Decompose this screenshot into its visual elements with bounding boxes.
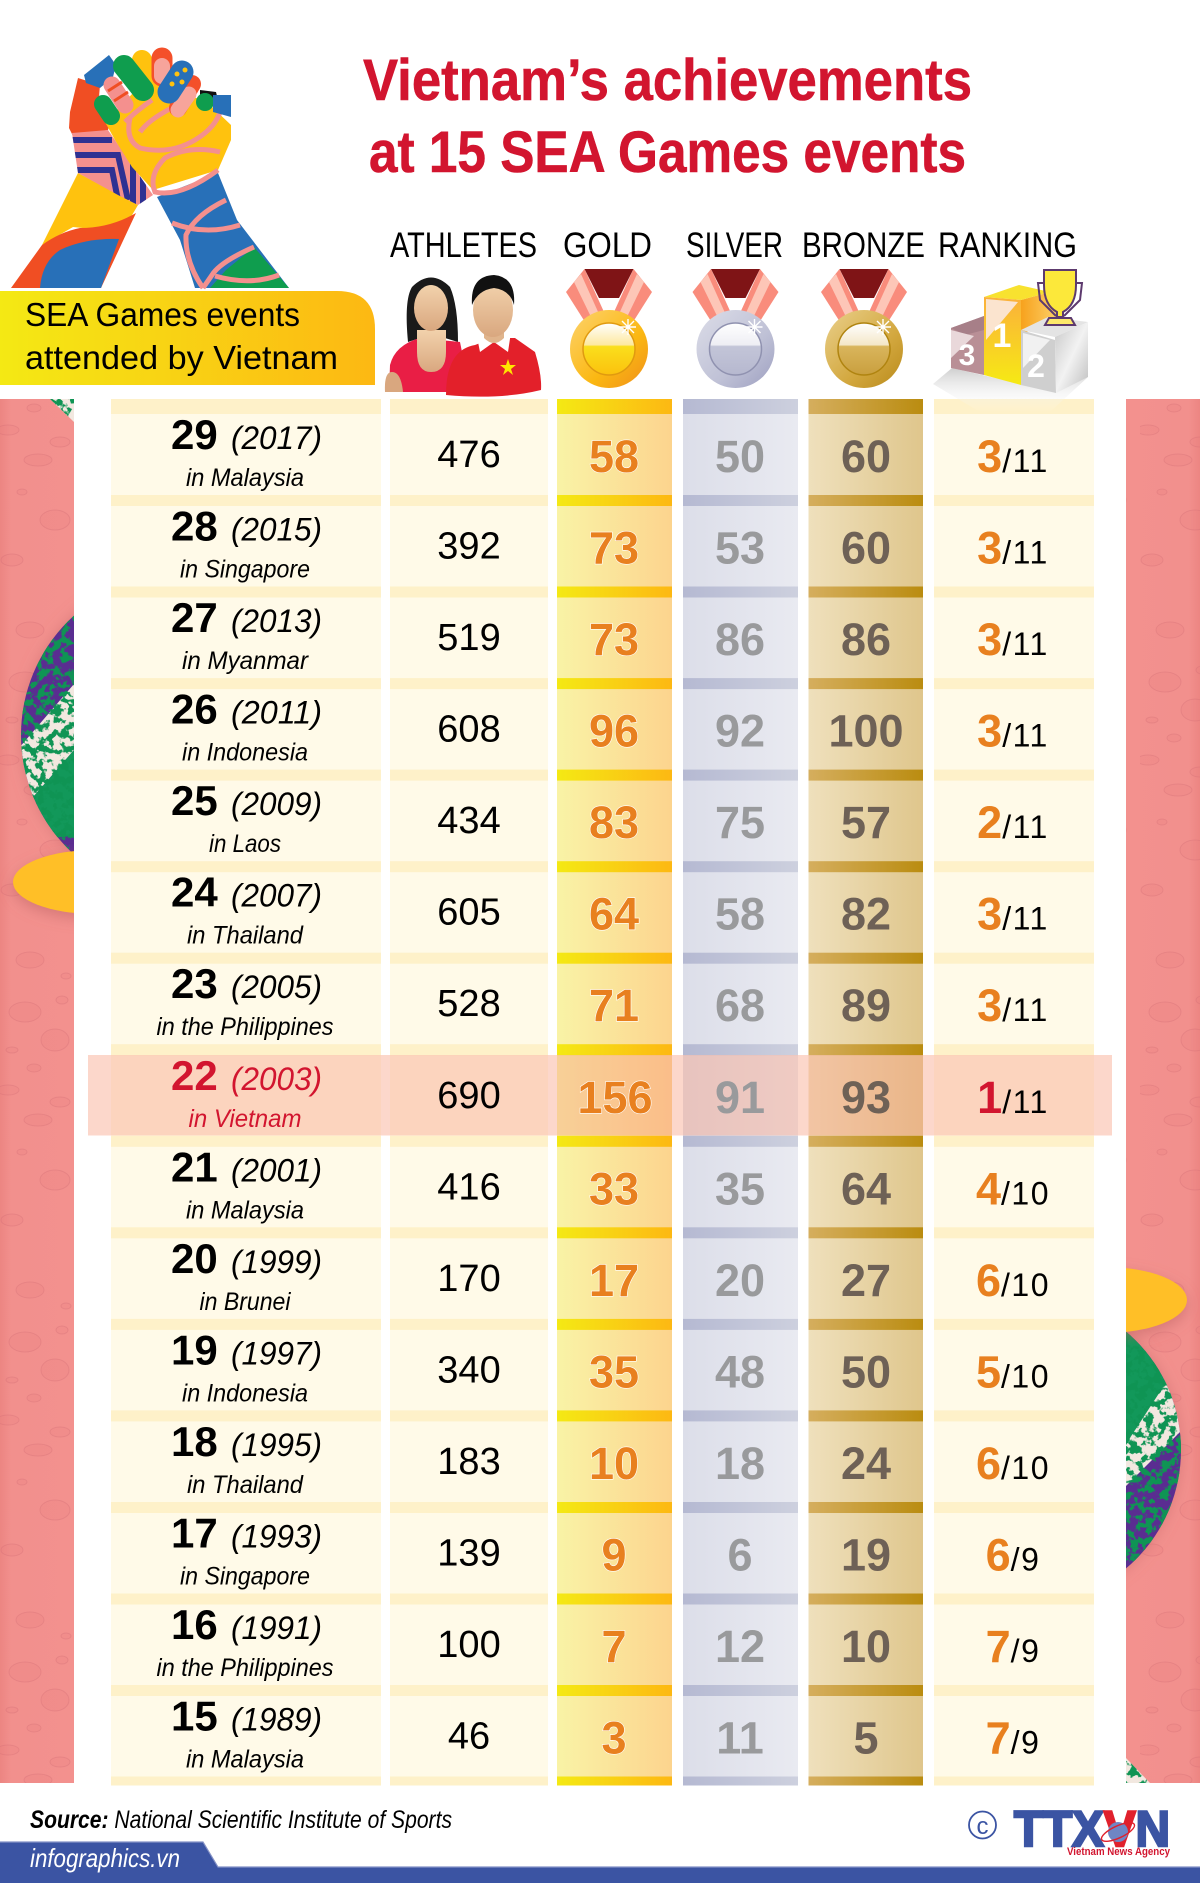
row: 16 (1991): in the Philippines	[156, 1654, 334, 1682]
column headers	[390, 226, 1077, 265]
row: 15 (1989): in Malaysia	[186, 1746, 304, 1774]
row: 15 (1989): 7/9	[986, 1713, 1040, 1764]
row: 27 (2013): (2013)	[231, 603, 322, 639]
source line: Source: National Scientific Institute of Sports	[30, 1806, 452, 1834]
row: 25 (2009): in Laos	[209, 830, 281, 858]
row: 15 (1989): 3	[601, 1713, 627, 1764]
row: 19 (1997): 19	[171, 1326, 218, 1373]
row: 22 (2003) host Vietnam	[171, 1052, 1049, 1133]
row: 24 (2007): in Thailand	[187, 922, 304, 950]
row: 21 (2001): (2001)	[231, 1152, 322, 1188]
row: 16 (1991): 12	[715, 1621, 765, 1672]
row: 15 (1989): 46	[448, 1716, 490, 1758]
row: 22 (2003) host Vietnam: 91	[715, 1072, 765, 1123]
row: 20 (1999): in Brunei	[200, 1288, 292, 1316]
column: gold	[557, 399, 672, 1786]
row: 20 (1999): 20	[715, 1255, 765, 1306]
row: 26 (2011)	[171, 686, 1049, 767]
icon: podium and trophy: 3	[959, 339, 975, 372]
row: 20 (1999): 27	[841, 1255, 891, 1306]
row: 24 (2007): 58	[715, 889, 765, 940]
row: 24 (2007)	[171, 869, 1049, 950]
logo: TTXVN Vietnam News Agency: TTXVN	[1014, 1801, 1170, 1857]
row: 26 (2011): 3/11	[977, 706, 1049, 757]
row: 21 (2001): 21	[171, 1143, 218, 1190]
row: 15 (1989): 5	[853, 1713, 879, 1764]
row: 23 (2005): 23	[171, 960, 218, 1007]
column: ranking	[934, 399, 1094, 1786]
row: 27 (2013): 3/11	[977, 614, 1049, 665]
row: 23 (2005): 68	[715, 980, 765, 1031]
row: 29 (2017): 3/11	[977, 431, 1049, 482]
row: 28 (2015): 3/11	[977, 522, 1049, 574]
row: 24 (2007): 3/11	[977, 889, 1049, 940]
row: 18 (1995): (1995)	[231, 1427, 322, 1463]
row: 28 (2015): 28	[171, 502, 218, 550]
row: 17 (1993): 9	[601, 1530, 627, 1580]
row: 17 (1993): in Singapore	[180, 1562, 310, 1590]
icon: bronze medal	[821, 269, 907, 388]
icon: podium and trophy	[933, 270, 1088, 412]
row: 28 (2015): in Singapore	[180, 556, 310, 584]
row: 23 (2005): (2005)	[231, 969, 322, 1005]
row: 18 (1995)	[171, 1418, 1050, 1499]
row: 18 (1995): 18	[715, 1438, 765, 1489]
row: 22 (2003) host Vietnam: 690	[437, 1075, 501, 1117]
row: 25 (2009): 25	[171, 777, 218, 824]
row: 26 (2011): 92	[715, 706, 765, 757]
row: 19 (1997): 48	[715, 1346, 765, 1397]
row: 20 (1999): (1999)	[231, 1244, 322, 1280]
row: 17 (1993): 19	[841, 1530, 891, 1580]
column: bronze	[808, 399, 923, 1786]
panel: right decorative pink strip	[1126, 399, 1200, 1783]
row: 25 (2009): 434	[437, 800, 501, 842]
row: 26 (2011): in Indonesia	[182, 739, 308, 767]
illustration: clasped hands	[11, 55, 289, 288]
row: 25 (2009): 2/11	[977, 797, 1049, 848]
row: 24 (2007): 64	[589, 889, 639, 940]
column headers: RANKING	[938, 226, 1077, 265]
row: 24 (2007): 605	[437, 892, 501, 934]
row: 23 (2005): 528	[437, 983, 501, 1025]
logo: TTXVN Vietnam News Agency: c	[976, 1813, 988, 1840]
row: 15 (1989): 11	[716, 1713, 764, 1764]
row: 22 (2003) host Vietnam: 156	[577, 1072, 653, 1123]
row: 24 (2007): (2007)	[231, 878, 322, 914]
icon: podium and trophy: 2	[1027, 348, 1045, 384]
row: 28 (2015): 60	[841, 522, 891, 574]
row: 29 (2017)	[171, 411, 1049, 492]
row: 15 (1989): 15	[171, 1693, 218, 1740]
row: 19 (1997): 340	[437, 1349, 501, 1391]
row: 18 (1995): 10	[589, 1438, 639, 1489]
row: 25 (2009): 83	[589, 797, 639, 848]
row: 28 (2015): 73	[589, 522, 639, 574]
row: 19 (1997): (1997)	[231, 1335, 322, 1371]
row: 21 (2001): 64	[841, 1163, 891, 1214]
row: 19 (1997)	[171, 1326, 1050, 1407]
column headers: ATHLETES	[390, 226, 537, 265]
banner: SEA Games events attended by Vietnam: SEA Games events	[25, 296, 300, 333]
row: 19 (1997): in Indonesia	[182, 1379, 308, 1407]
row: 20 (1999): 20	[171, 1235, 218, 1282]
row: 27 (2013)	[171, 594, 1049, 675]
footer bar: infographics.vn	[30, 1843, 180, 1873]
row: 20 (1999): 6/10	[976, 1255, 1050, 1306]
row: 26 (2011): 608	[437, 709, 501, 751]
row: 19 (1997): 5/10	[976, 1346, 1050, 1397]
row: 21 (2001): 416	[437, 1166, 501, 1208]
row: 21 (2001): in Malaysia	[186, 1196, 304, 1224]
column headers: SILVER	[686, 226, 783, 265]
row: 28 (2015): 53	[715, 522, 765, 574]
icon: athletes	[385, 275, 541, 397]
row: 20 (1999): 170	[437, 1258, 501, 1300]
row: 17 (1993)	[171, 1510, 1040, 1590]
row: 29 (2017): 50	[715, 431, 765, 482]
footer bar	[0, 1842, 1200, 1883]
row: 17 (1993): 139	[437, 1532, 501, 1574]
row: 19 (1997): 35	[589, 1346, 639, 1397]
icon: silver medal	[692, 269, 778, 388]
row: 27 (2013): 73	[589, 614, 639, 665]
row: 26 (2011): 26	[171, 686, 218, 733]
row: 22 (2003) host Vietnam: in Vietnam	[188, 1105, 302, 1133]
banner: SEA Games events attended by Vietnam: attended by Vietnam	[25, 339, 338, 376]
row: 26 (2011): 96	[589, 706, 639, 757]
row: 23 (2005): in the Philippines	[156, 1013, 334, 1041]
row: 19 (1997): 50	[841, 1346, 891, 1397]
row: 25 (2009): 57	[841, 797, 891, 848]
row: 25 (2009): 75	[715, 797, 765, 848]
icon: gold medal	[566, 269, 652, 388]
row: 21 (2001): 33	[589, 1163, 639, 1214]
row: 22 (2003) host Vietnam: 22	[171, 1052, 218, 1099]
row: 27 (2013): 519	[437, 617, 501, 659]
row: 29 (2017): (2017)	[231, 420, 322, 456]
row: 16 (1991): 16	[171, 1601, 218, 1648]
row: 21 (2001): 4/10	[976, 1163, 1050, 1214]
row: 17 (1993): 6/9	[986, 1530, 1040, 1580]
highlight band: Vietnam host year	[88, 1055, 1112, 1136]
row: 23 (2005): 71	[589, 980, 639, 1031]
row: 27 (2013): 86	[841, 614, 891, 665]
row: 24 (2007): 24	[171, 869, 218, 916]
row: 27 (2013): 27	[171, 594, 218, 641]
row: 18 (1995): 6/10	[976, 1438, 1050, 1489]
row: 16 (1991): 7	[601, 1621, 627, 1672]
row: 21 (2001): 35	[715, 1163, 765, 1214]
row: 22 (2003) host Vietnam: 1/11	[977, 1072, 1049, 1123]
row: 29 (2017): 58	[589, 431, 639, 482]
row: 23 (2005)	[156, 960, 1049, 1041]
row: 18 (1995): 24	[841, 1438, 891, 1489]
column: event names	[111, 399, 381, 1786]
row: 20 (1999): 17	[589, 1255, 639, 1306]
column headers: GOLD	[563, 226, 652, 265]
row: 28 (2015): (2015)	[231, 512, 322, 548]
row: 23 (2005): 89	[841, 980, 891, 1031]
title	[363, 48, 972, 185]
logo: TTXVN Vietnam News Agency: Vietnam News Agency	[1067, 1846, 1171, 1858]
row: 23 (2005): 3/11	[977, 980, 1049, 1031]
row: 28 (2015)	[171, 502, 1049, 584]
title: Vietnam’s achievements	[363, 48, 972, 113]
row: 27 (2013): 86	[715, 614, 765, 665]
row: 22 (2003) host Vietnam: 93	[841, 1072, 891, 1123]
row: 22 (2003) host Vietnam: (2003)	[231, 1061, 322, 1097]
row: 25 (2009): (2009)	[231, 786, 322, 822]
row: 16 (1991): 100	[437, 1624, 501, 1666]
row: 24 (2007): 82	[841, 889, 891, 940]
row: 15 (1989): (1989)	[231, 1702, 322, 1738]
row: 29 (2017): 29	[171, 411, 218, 458]
column: silver	[683, 399, 798, 1786]
row: 29 (2017): in Malaysia	[186, 464, 304, 492]
icon: podium and trophy: 1	[993, 317, 1011, 355]
row: 17 (1993): 6	[727, 1530, 753, 1580]
row: 16 (1991): 10	[841, 1621, 891, 1672]
row: 26 (2011): 100	[828, 706, 904, 757]
column: athletes	[390, 399, 548, 1786]
row: 25 (2009)	[171, 777, 1049, 858]
row: 16 (1991): 7/9	[986, 1621, 1040, 1672]
row: 17 (1993): (1993)	[231, 1518, 322, 1554]
title: at 15 SEA Games events	[369, 120, 966, 185]
row: 29 (2017): 476	[437, 434, 501, 476]
banner: SEA Games events attended by Vietnam	[0, 291, 375, 385]
row: 21 (2001)	[171, 1143, 1050, 1224]
row: 18 (1995): 183	[437, 1441, 501, 1483]
row: 18 (1995): 18	[171, 1418, 218, 1465]
column headers: BRONZE	[802, 226, 925, 265]
row: 18 (1995): in Thailand	[187, 1471, 304, 1499]
row: 26 (2011): (2011)	[231, 695, 322, 731]
row: 15 (1989)	[171, 1693, 1040, 1774]
row: 29 (2017): 60	[841, 431, 891, 482]
row: 28 (2015): 392	[437, 526, 501, 568]
row: 16 (1991)	[156, 1601, 1040, 1682]
row: 17 (1993): 17	[171, 1510, 218, 1556]
panel: left decorative pink strip	[0, 399, 74, 1783]
row: 27 (2013): in Myanmar	[182, 647, 310, 675]
row: 16 (1991): (1991)	[231, 1610, 322, 1646]
row: 20 (1999)	[171, 1235, 1050, 1316]
